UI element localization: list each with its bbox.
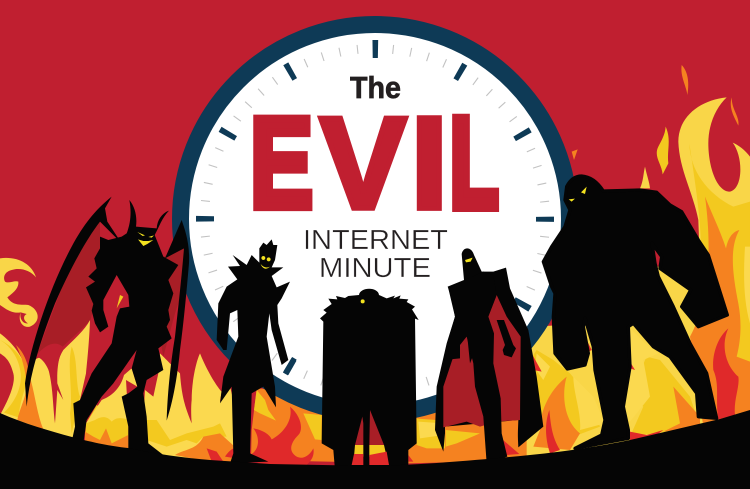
brute silhouette — [543, 176, 727, 448]
gap between legs — [355, 410, 384, 445]
caped figure right arm — [497, 320, 516, 357]
clock ring — [180, 24, 570, 414]
caped figure eye — [465, 258, 473, 262]
title word: EVIL — [250, 89, 498, 237]
demon wing membranes — [37, 220, 186, 357]
title word: EVIL: E — [250, 91, 313, 234]
demon eyes and grin — [137, 232, 154, 246]
left flame curl — [0, 258, 38, 327]
villain: caped figure — [435, 248, 543, 463]
middle flames — [250, 360, 560, 465]
title — [250, 70, 498, 283]
flame below cape lining — [445, 420, 518, 450]
minute ticks — [204, 48, 546, 390]
figure eyes and smile — [261, 256, 271, 269]
title word: INTERNET: INTERNET — [303, 224, 448, 255]
black ground — [0, 410, 750, 489]
title word: EVIL: V — [320, 92, 406, 236]
flame wisps — [572, 65, 739, 188]
villain: winged demon — [25, 197, 189, 455]
figure phone — [283, 358, 296, 375]
cape outer — [435, 248, 543, 452]
cloak eye — [361, 299, 365, 303]
clock — [180, 24, 570, 414]
brute eyes — [569, 187, 587, 202]
villain: furry cloaked figure — [320, 289, 419, 470]
demon silhouette — [25, 197, 189, 455]
cloak silhouette — [320, 289, 419, 470]
figure silhouette — [217, 239, 290, 463]
hour ticks — [205, 49, 545, 389]
villain: spiky-collar figure — [217, 239, 296, 463]
title word: The: The — [350, 70, 401, 105]
lower left flames — [0, 320, 238, 462]
phone behind cape — [516, 299, 532, 312]
right flames — [527, 97, 750, 457]
small flame at waist — [117, 295, 123, 308]
caped figure body — [447, 272, 507, 463]
title word: EVIL: L — [450, 92, 498, 235]
cape lining — [443, 295, 521, 427]
villain: hulking brute — [543, 176, 727, 448]
title word: MINUTE: MINUTE — [319, 252, 431, 283]
title word: EVIL: I — [410, 89, 449, 237]
